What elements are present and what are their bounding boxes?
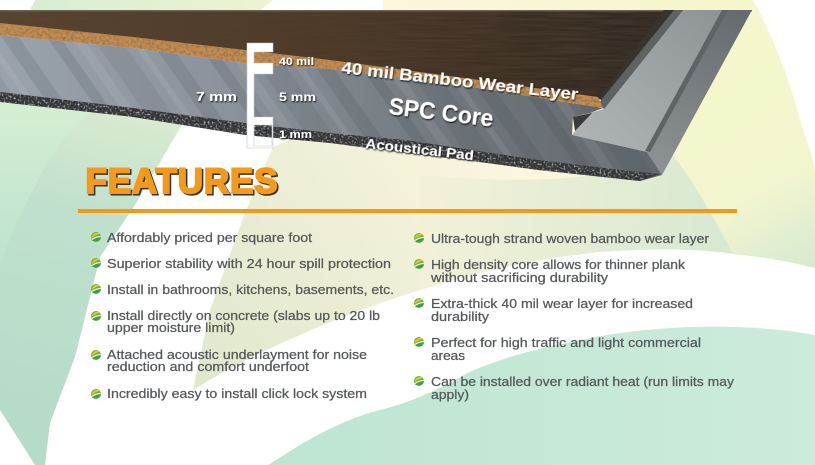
item: acoustic underlayment: reduction and comfort underfoot (107, 359, 309, 374)
item: radiant heat: apply) (431, 387, 469, 402)
item: install in bathrooms: Install in bathrooms, kitchens, basements, etc. (107, 282, 394, 297)
item: extra thick: durability (431, 309, 490, 324)
item: acoustic underlayment (91, 347, 367, 374)
heading: FEATURES: FEATURES (86, 162, 278, 201)
item: superior stability: Superior stability with 24 hour spill protection (107, 256, 391, 271)
bamboo wear layer (0, 23, 603, 108)
item: high density core: without sacrificing durability (430, 270, 609, 285)
feature list: right column (414, 231, 735, 402)
SPC core layer (0, 35, 662, 181)
wood top surface (0, 10, 752, 100)
orange divider rule (78, 209, 737, 213)
label: 5 mm: 5 mm (279, 92, 316, 104)
item: acoustic underlayment: Attached acoustic underlayment for noise (107, 347, 367, 362)
item: high traffic: areas (431, 348, 466, 363)
item: high density core: High density core allows for thinner plank (431, 257, 686, 272)
label: Acoustical Pad: Acoustical Pad (365, 136, 475, 163)
item: extra thick (414, 296, 693, 324)
feature list: left column (91, 230, 394, 401)
grey tongue and groove edge (572, 10, 752, 175)
thickness bracket (247, 43, 273, 148)
plank cross-section photo (0, 10, 752, 181)
label: 40 mil Bamboo Wear Layer: 40 mil Bamboo Wear Layer (341, 58, 580, 104)
item: high traffic: Perfect for high traffic and light commercial (431, 335, 701, 350)
acoustical pad (0, 92, 660, 181)
item: wear layer: Ultra-tough strand woven bamboo wear layer (431, 231, 710, 246)
heading: FEATURES: FEATURES (87, 164, 279, 202)
item: install on concrete: Install directly on concrete (slabs up to 20 lb (107, 308, 380, 323)
item: install on concrete: upper moisture limit) (107, 320, 235, 335)
label: SPC Core: SPC Core (387, 93, 495, 133)
item: extra thick: Extra-thick 40 mil wear layer for increased (431, 296, 693, 311)
item: high density core (414, 257, 686, 285)
item: click lock: Incredibly easy to install click lock system (107, 386, 367, 401)
label: 1 mm: 1 mm (279, 129, 312, 141)
label: 40 mil: 40 mil (279, 56, 314, 68)
item: install on concrete (91, 308, 380, 335)
label: 7 mm: 7 mm (196, 89, 237, 104)
item: high traffic (414, 335, 701, 363)
item: radiant heat: Can be installed over radiant heat (run limits may (431, 374, 735, 389)
item: affordably priced: Affordably priced per square foot (107, 230, 312, 245)
item: radiant heat (414, 374, 735, 402)
